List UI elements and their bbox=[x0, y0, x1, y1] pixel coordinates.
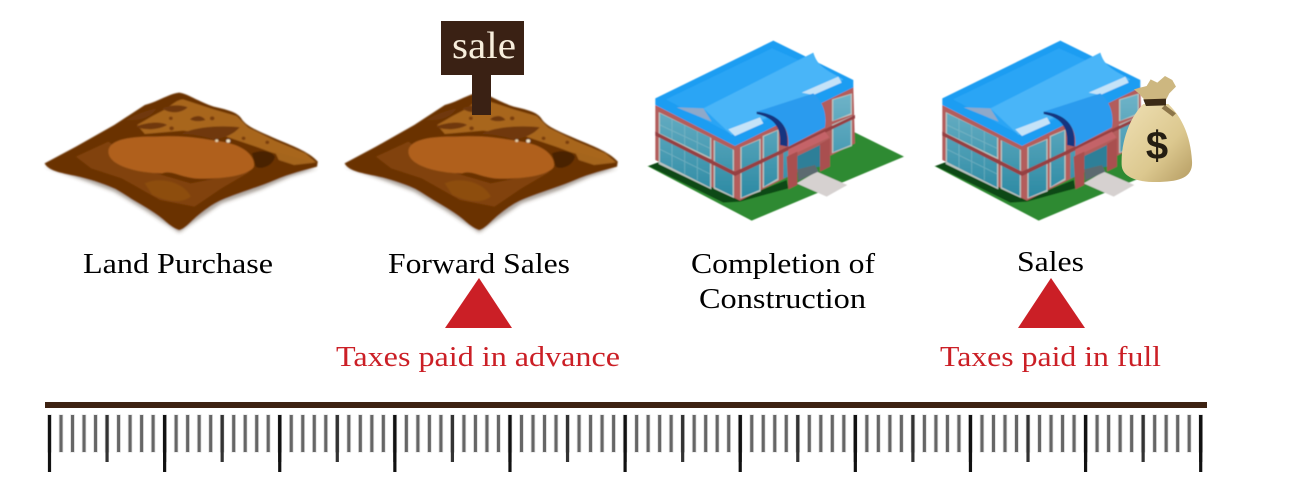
icon: completed building bbox=[647, 41, 904, 221]
marker: sales triangle bbox=[1018, 278, 1085, 328]
icon: building with money bag: $ bbox=[1146, 124, 1168, 168]
callout: taxes paid in full: Taxes paid in full bbox=[940, 341, 1161, 373]
callout: taxes paid in advance: Taxes paid in advance bbox=[336, 341, 620, 373]
marker: forward sales triangle bbox=[445, 278, 512, 328]
label: completion of construction: Construction bbox=[699, 284, 866, 315]
timeline bar bbox=[45, 402, 1207, 408]
label: completion of construction bbox=[691, 249, 876, 315]
icon: land plot bbox=[45, 93, 318, 233]
icon: land plot with sale sign: sale bbox=[452, 25, 516, 67]
label: forward sales: Forward Sales bbox=[388, 249, 570, 280]
icon: building with money bag bbox=[934, 41, 1192, 221]
icon: land plot with sale sign bbox=[345, 21, 618, 233]
label: land purchase: Land Purchase bbox=[83, 249, 273, 280]
label: completion of construction: Completion of bbox=[691, 249, 876, 280]
timeline ruler ticks bbox=[47, 434, 1204, 444]
label: sales: Sales bbox=[1017, 247, 1084, 278]
